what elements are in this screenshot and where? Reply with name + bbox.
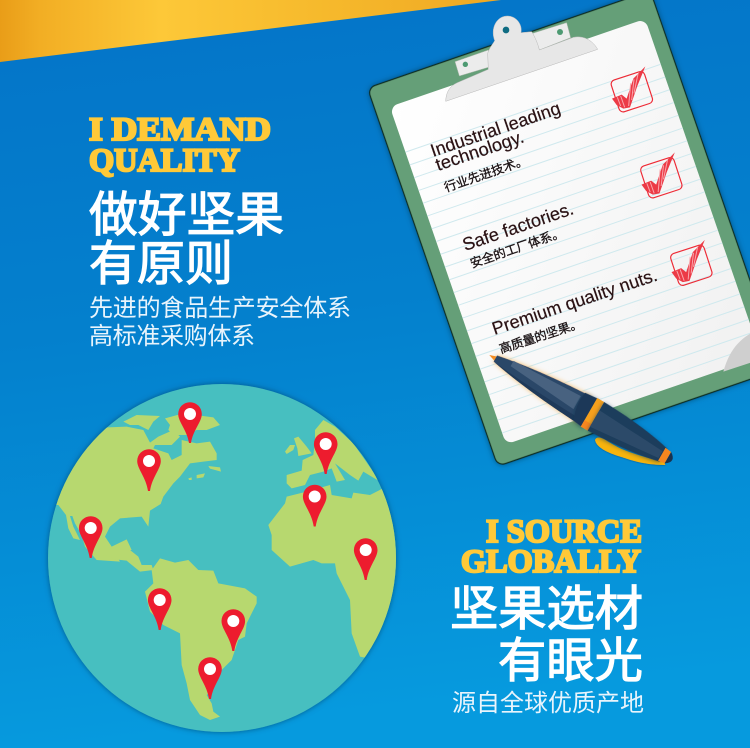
clipboard board: [368, 0, 750, 466]
note 2: 安全的工厂体系。: [468, 225, 566, 271]
note 3: 高质量的坚果。: [497, 316, 584, 356]
page curl: [723, 333, 750, 372]
heading: I demand quality: I DEMAND: [89, 112, 271, 148]
pen clip: [595, 438, 665, 465]
globe: [40, 384, 407, 732]
map pin 3: [79, 516, 102, 558]
heading: I source globally: I SOURCE: [486, 514, 642, 550]
heading: I source globally: GLOBALLY: [461, 544, 641, 580]
note 3: Premium quality nuts.: [489, 265, 660, 339]
checkbox 3: [670, 240, 713, 286]
note 1: 行业先进技术。: [442, 153, 529, 195]
map pin 2: [137, 449, 161, 491]
text block: quality description: 先进的食品生产安全体系: [89, 295, 351, 322]
south america: [115, 550, 257, 720]
globe ocean: [48, 384, 396, 732]
clipboard: [368, 0, 750, 466]
heading: Chinese quality title: 有原则: [89, 238, 233, 291]
heading: Chinese sourcing title: 坚果选材: [450, 583, 643, 636]
heading: I source globally: [461, 514, 642, 580]
heading: I demand quality: QUALITY: [89, 143, 240, 179]
heading: Chinese quality title: 做好坚果: [89, 189, 284, 242]
text block: sourcing description: 源自全球优质产地: [452, 690, 644, 717]
map pin 1: [178, 402, 202, 443]
map pin 4: [314, 432, 338, 474]
text block: quality description: 高标准采购体系: [89, 323, 255, 350]
note 1: technology.: [433, 127, 527, 175]
map pin 8: [222, 609, 245, 651]
checkbox 2: [640, 152, 683, 199]
heading: I demand quality: [89, 112, 271, 179]
europe and africa: [268, 420, 407, 660]
pen: [481, 341, 680, 474]
paper sheet: [390, 19, 750, 444]
map pin 9: [198, 657, 222, 699]
map pin 7: [148, 588, 172, 630]
map pin 6: [354, 538, 378, 580]
globe continents: [40, 413, 407, 720]
north america: [40, 413, 221, 562]
pen body: [481, 341, 680, 474]
metal clip: [446, 16, 598, 101]
note 2: Safe factories.: [460, 198, 576, 255]
note 1: Industrial leading: [428, 98, 563, 161]
heading: Chinese quality title: [89, 189, 284, 291]
heading: Chinese sourcing title: [450, 583, 643, 688]
heading: Chinese sourcing title: 有眼光: [498, 635, 643, 688]
map pin 5: [303, 485, 326, 526]
note 1: [428, 98, 563, 195]
text block: quality description: [89, 295, 351, 350]
checkbox 1: [610, 66, 654, 113]
gold corner band: [0, 0, 501, 62]
